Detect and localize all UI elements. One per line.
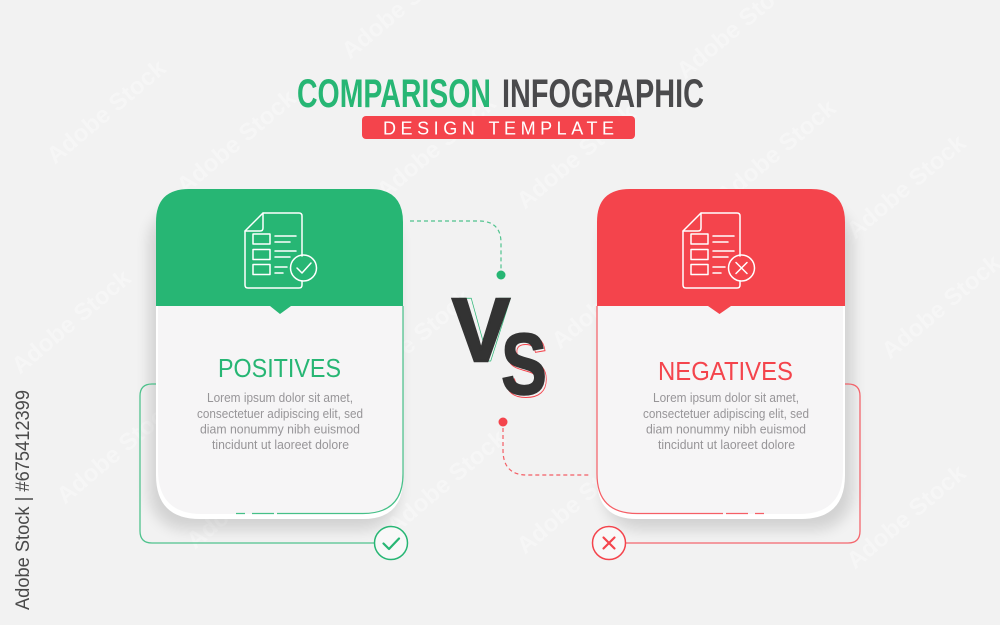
- body text: positives: consectetuer adipiscing elit, sed: [197, 407, 363, 421]
- body text: positives: diam nonummy nibh euismod: [200, 422, 360, 436]
- body text: positives: tincidunt ut laoreet dolore: [212, 438, 349, 452]
- body text: negatives: consectetuer adipiscing elit, sed: [643, 407, 809, 421]
- icon: document with cross: [683, 213, 754, 288]
- red dashed connector: [498, 418, 591, 475]
- body text: positives: [197, 391, 363, 452]
- green frame line: [140, 384, 375, 543]
- watermark pattern: Adobe Stock: [52, 394, 182, 510]
- body text: negatives: Lorem ipsum dolor sit amet,: [653, 391, 799, 405]
- body text: negatives: diam nonummy nibh euismod: [646, 422, 806, 436]
- card shadow: [149, 205, 399, 530]
- icon: check badge: [374, 526, 408, 560]
- panel: negatives: [592, 189, 860, 560]
- v outline accent: V: [459, 280, 511, 381]
- title: COMPARISON: [297, 72, 491, 116]
- watermark pattern: Adobe Stock: [842, 459, 972, 575]
- watermark pattern: Adobe Stock: [547, 239, 677, 355]
- card base: [156, 306, 403, 519]
- heading: negatives: NEGATIVES: [658, 356, 793, 386]
- card base: [597, 306, 845, 519]
- body text: positives: Lorem ipsum dolor sit amet,: [207, 391, 353, 405]
- watermark pattern: Adobe Stock: [842, 129, 972, 245]
- red header: [597, 189, 845, 314]
- watermark pattern: Adobe Stock: [172, 84, 302, 200]
- side credit text: Adobe Stock | #675412399: [13, 390, 34, 610]
- watermark pattern: Adobe Stock: [512, 444, 642, 560]
- body text: negatives: [643, 391, 809, 452]
- letter s: S: [501, 316, 547, 413]
- card shadow: [603, 205, 853, 530]
- card outline: [597, 306, 764, 514]
- green header: [156, 189, 403, 314]
- watermark pattern: Adobe Stock: [182, 439, 312, 555]
- card outline: [236, 306, 403, 514]
- icon: cross badge: [592, 526, 626, 560]
- icon: document with check: [245, 213, 316, 288]
- letter v: V: [452, 281, 510, 381]
- card body: [158, 306, 403, 514]
- watermark pattern: Adobe Stock: [7, 264, 137, 380]
- watermark pattern: Adobe Stock: [512, 99, 642, 215]
- vs emblem: [452, 280, 549, 416]
- s outline accent: S: [503, 318, 549, 416]
- green dashed connector: [410, 221, 506, 280]
- watermark pattern: Adobe Stock: [42, 54, 172, 170]
- red frame line: [625, 384, 860, 543]
- card body: [597, 306, 843, 514]
- watermark pattern: Adobe Stock: [347, 284, 477, 400]
- panel: positives: [140, 189, 408, 560]
- title: [297, 72, 704, 116]
- watermark pattern: Adobe Stock: [372, 89, 502, 205]
- watermark pattern: Adobe Stock: [382, 424, 512, 540]
- watermark pattern: Adobe Stock: [717, 369, 847, 485]
- subtitle banner: DESIGN TEMPLATE: [383, 118, 614, 138]
- title: INFOGRAPHIC: [502, 72, 704, 116]
- watermark pattern: Adobe Stock: [217, 239, 347, 355]
- watermark pattern: Adobe Stock: [712, 94, 842, 210]
- body text: negatives: tincidunt ut laoreet dolore: [658, 438, 795, 452]
- heading: positives: POSITIVES: [218, 353, 341, 383]
